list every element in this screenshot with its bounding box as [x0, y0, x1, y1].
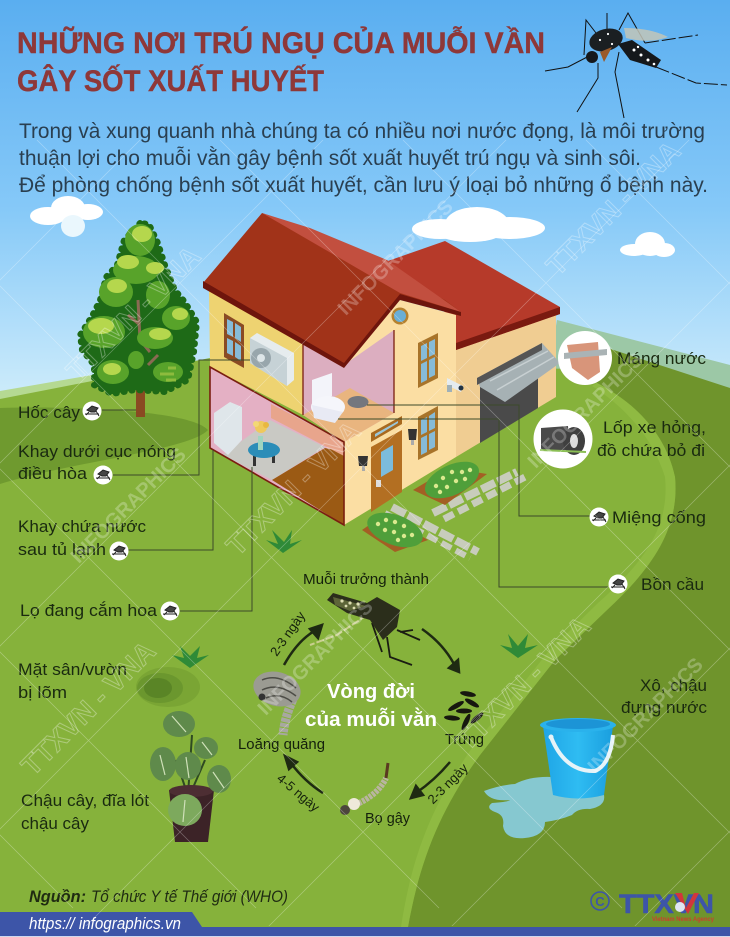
watermark lattice and text: INFOGRAPHICS	[254, 596, 378, 720]
cloud: left	[30, 196, 103, 237]
arrow: pupa to adult	[284, 625, 322, 665]
circle icon: tyres	[534, 410, 592, 468]
right wing wall	[456, 312, 556, 457]
label: Chậu cây, đĩa lót chậu cây	[21, 791, 149, 833]
floor drain	[348, 396, 368, 408]
intro text block: Để phòng chống bệnh sốt xuất huyết, cần lưu ý loại bỏ những ổ bệnh này.	[19, 174, 708, 197]
footer bar with URL: https:// infographics.vn	[29, 914, 181, 933]
stage label: Muỗi trưởng thành: Muỗi trưởng thành	[303, 571, 429, 588]
arrow: larva to pupa	[285, 756, 323, 793]
right wing roof	[385, 241, 560, 350]
upper front window	[418, 333, 438, 388]
title: NHỮNG NƠI TRÚ NGỤ CỦA MUỖI VẦN	[17, 26, 545, 60]
title: GÂY SỐT XUẤT HUYẾT	[17, 64, 324, 98]
left wall upper	[209, 288, 303, 415]
lamps	[358, 429, 417, 471]
intro text block: thuận lợi cho muỗi vằn gây bệnh sốt xuất huyết trú ngụ và sinh sôi.	[19, 147, 641, 170]
label: Xô, chậu đựng nước: đựng nước	[621, 698, 708, 717]
toilet	[311, 373, 345, 423]
label: Chậu cây, đĩa lót chậu cây: chậu cây	[21, 814, 89, 833]
label: Khay chứa nước sau tủ lạnh	[18, 517, 147, 560]
icon: eggs	[444, 690, 485, 731]
icon: potted plant	[150, 711, 231, 842]
arrow: eggs to larva	[411, 762, 450, 798]
TTXVN logo	[591, 889, 714, 923]
label: Lọ đang cắm hoa: Lọ đang cắm hoa	[20, 601, 158, 620]
label: Khay dưới cục nóng điều hòa: điều hòa	[18, 464, 88, 483]
watermark lattice and text: INFOGRAPHICS	[67, 444, 191, 568]
background: sky	[0, 0, 730, 420]
garage door	[480, 373, 538, 443]
label: Khay dưới cục nóng điều hòa: Khay dưới cục nóng	[18, 442, 176, 461]
duration label: 2-3 ngày pupa to adult: 2-3 ngày	[267, 608, 309, 659]
callout lines	[102, 360, 608, 611]
TTXVN logo: TTXVN	[619, 889, 714, 919]
duration label: 2-3 ngày eggs to larva: 2-3 ngày	[424, 760, 471, 807]
stage label: Trứng: Trứng	[445, 732, 484, 748]
watermark lattice and text: TTXVN - VNA	[60, 240, 206, 386]
left window	[224, 313, 244, 368]
door	[371, 416, 402, 512]
icon: hollow in yard	[136, 667, 200, 707]
watermark lattice and text: INFOGRAPHICS	[334, 196, 458, 320]
intro text block	[19, 120, 708, 197]
icon: pupa	[249, 666, 305, 735]
label: Khay chứa nước sau tủ lạnh: sau tủ lạnh	[18, 540, 106, 559]
cloud: centre	[412, 207, 545, 242]
stage label: Loăng quăng: Loăng quăng	[238, 737, 325, 753]
duration label: 4-5 ngày: 4-5 ngày	[274, 771, 323, 815]
label: Mặt sân/vườn bị lõm	[18, 660, 127, 702]
intro text block: Trong và xung quanh nhà chúng ta có nhiều nơi nước đọng, là môi trường	[19, 120, 705, 143]
label: Hốc cây: Hốc cây	[18, 403, 80, 422]
lower front window	[418, 406, 438, 460]
watermark lattice and text: INFOGRAPHICS	[524, 349, 648, 473]
icon: adult mosquito	[310, 593, 420, 665]
label: Khay dưới cục nóng điều hòa	[18, 442, 176, 484]
tree	[80, 223, 197, 417]
house	[203, 213, 560, 525]
source line: Nguồn:	[29, 888, 86, 906]
round window	[392, 308, 408, 324]
background: ground hills	[0, 320, 730, 937]
watermark lattice and text: TTXVN - VNA	[450, 610, 596, 756]
icon: mosquito top right	[545, 13, 727, 118]
fridge	[214, 402, 242, 455]
label: Bồn cầu	[608, 574, 704, 594]
upper room cutaway	[303, 330, 394, 442]
label: Hốc cây	[18, 402, 102, 422]
title	[17, 26, 545, 98]
watermark lattice and text: TTXVN - VNA	[220, 415, 366, 561]
grass tuft right	[500, 634, 538, 658]
life cycle centre heading	[305, 681, 437, 731]
watermark lattice and text: TTXVN - VNA	[540, 135, 686, 281]
label: Lốp xe hỏng, đồ chứa bỏ đi: đồ chứa bỏ đi	[597, 441, 705, 460]
label: Chậu cây, đĩa lót chậu cây: Chậu cây, đĩa lót	[21, 791, 149, 810]
icon: bucket and puddle	[484, 718, 616, 838]
icon: larva	[340, 763, 388, 815]
security camera	[447, 378, 464, 392]
garden beds and path	[362, 454, 527, 558]
watermark lattice and text: INFOGRAPHICS	[584, 654, 708, 778]
TTXVN logo: Vietnam News Agency	[652, 916, 714, 923]
main roof	[203, 213, 461, 364]
table	[248, 442, 280, 466]
label: Mặt sân/vườn bị lõm: bị lõm	[18, 683, 67, 702]
label: Bồn cầu: Bồn cầu	[641, 575, 704, 594]
garage awning	[477, 343, 560, 402]
TTXVN logo: C	[595, 894, 605, 909]
label: Lốp xe hỏng, đồ chứa bỏ đi	[597, 418, 706, 460]
circle icon: gutter	[558, 331, 612, 385]
arrow: adult to eggs	[422, 629, 459, 672]
front wall	[344, 300, 456, 525]
label: Xô, chậu đựng nước: Xô, chậu	[640, 676, 707, 695]
label: Máng nước: Máng nước	[617, 349, 707, 368]
cloud: right	[620, 232, 675, 257]
life cycle centre heading: Vòng đời	[327, 681, 415, 703]
footer bar with URL	[0, 912, 730, 937]
label: Xô, chậu đựng nước	[621, 676, 708, 717]
label: Khay chứa nước sau tủ lạnh: Khay chứa nước	[18, 517, 147, 536]
stage label: Bọ gậy: Bọ gậy	[365, 811, 411, 827]
watermark lattice and text: TTXVN - VNA	[15, 635, 161, 781]
air conditioner	[250, 333, 294, 386]
lower room cutaway	[210, 367, 344, 525]
label: Miệng cống: Miệng cống	[612, 508, 706, 527]
vase with flowers	[253, 421, 269, 450]
source line: Tổ chức Y tế Thế giới (WHO)	[91, 888, 288, 906]
life cycle centre heading: của muỗi vằn	[305, 707, 437, 731]
label: Mặt sân/vườn bị lõm: Mặt sân/vườn	[18, 660, 127, 679]
grass tuft left	[172, 646, 209, 668]
grass tuft near house	[266, 530, 302, 553]
label: Lốp xe hỏng, đồ chứa bỏ đi: Lốp xe hỏng,	[603, 418, 706, 437]
